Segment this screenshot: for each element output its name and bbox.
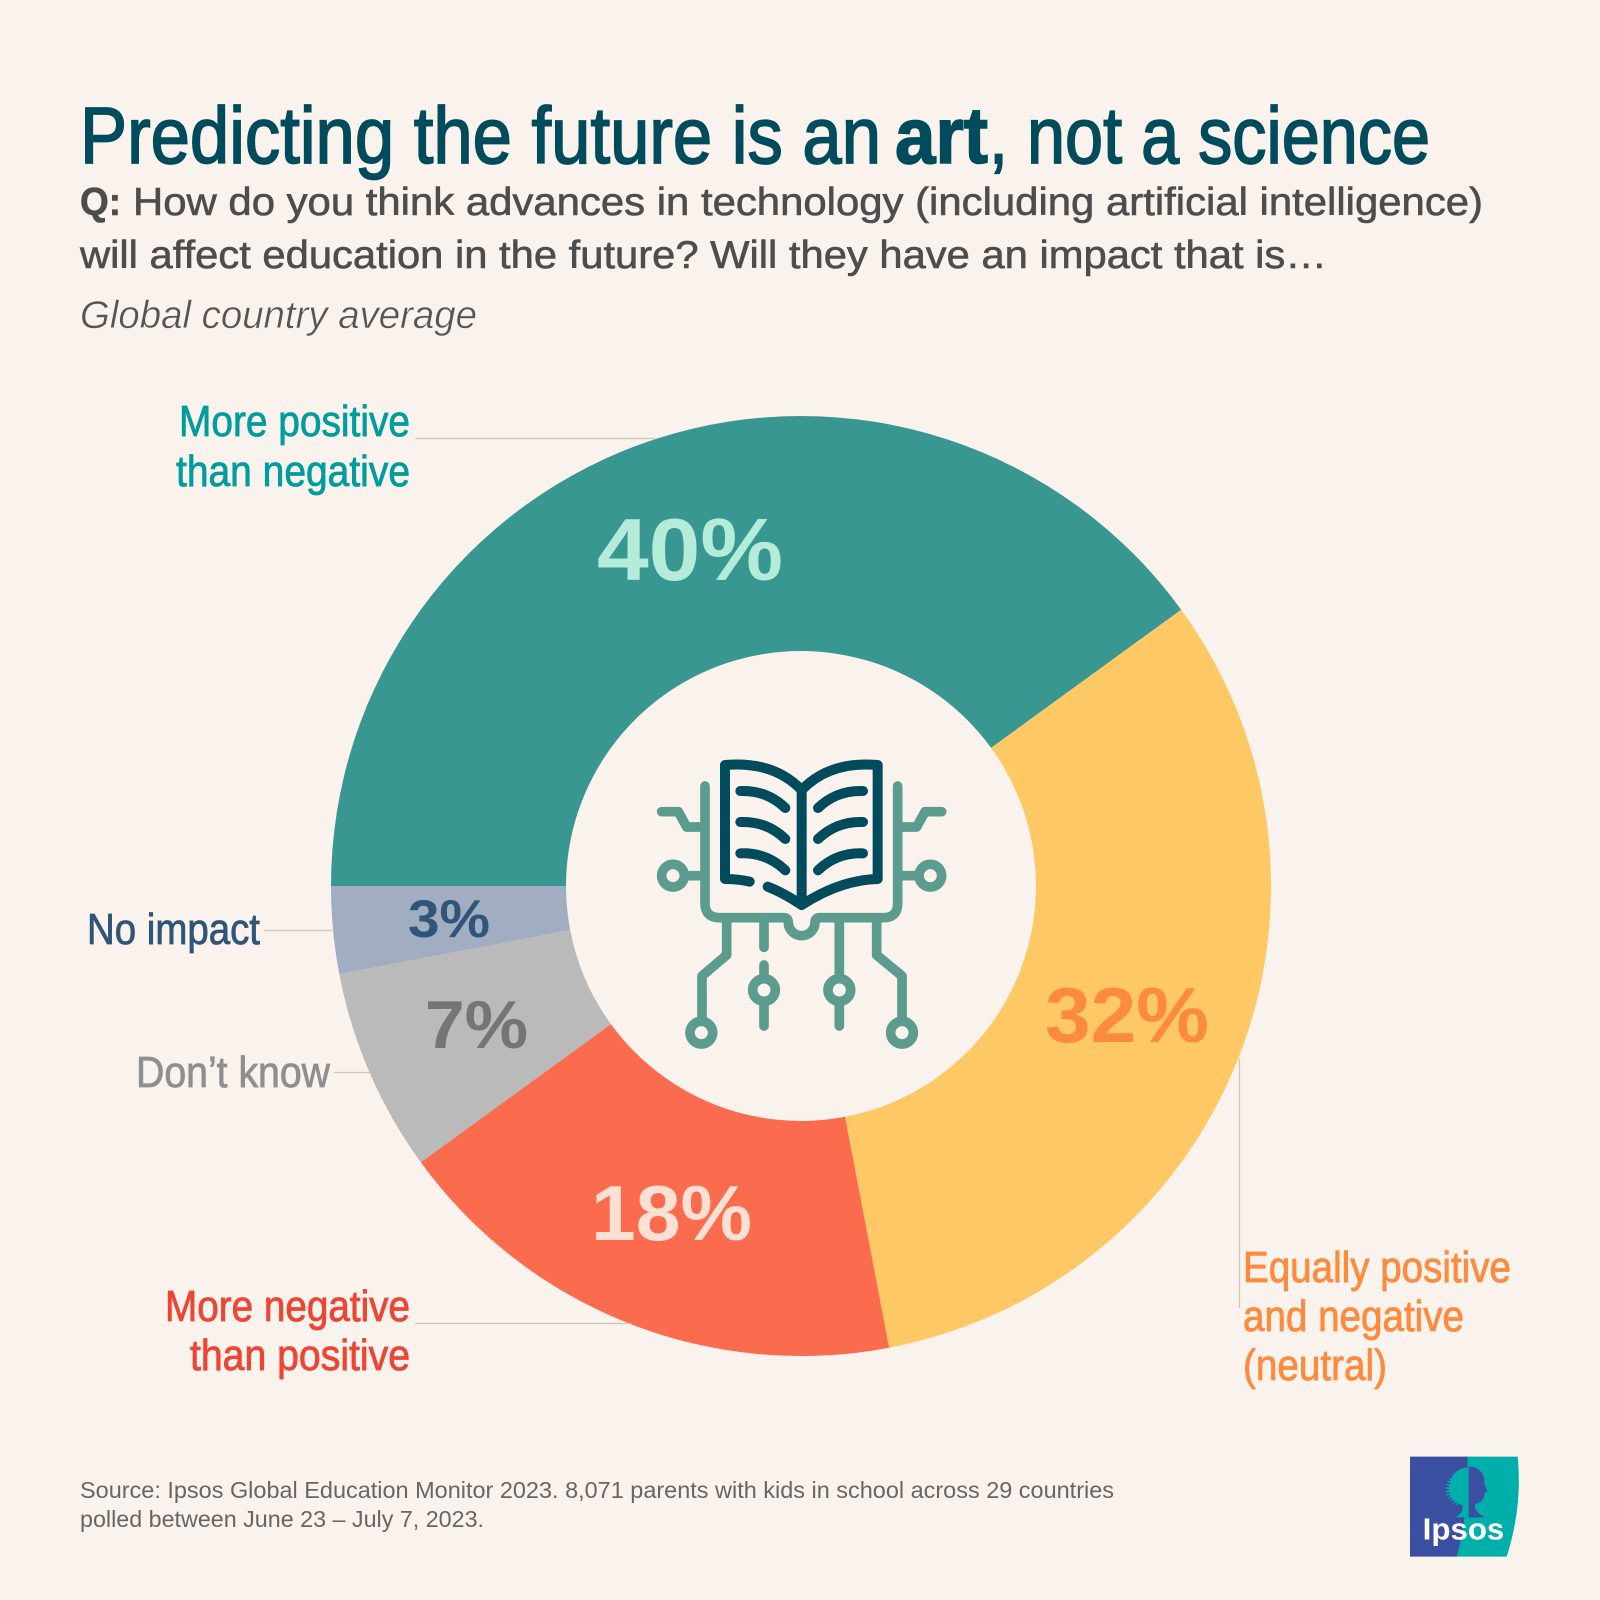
slice: no impact 3% (331, 886, 570, 974)
leader lines (264, 438, 1240, 1324)
logo: wordmark: Ipsos (1423, 1512, 1504, 1546)
label: more positive than negative: More positive (179, 397, 410, 446)
icon: open book (725, 764, 878, 905)
label: don't know: Don’t know (136, 1048, 330, 1097)
title: Predicting the future is an (80, 91, 881, 180)
question text (79, 181, 1483, 277)
subtitle: global country average: Global country average (80, 294, 477, 337)
value: 3%: 3% (408, 890, 490, 949)
label: more positive than negative (176, 397, 410, 496)
icon: book with circuit (662, 764, 942, 1044)
icon: circuit traces (662, 786, 942, 1044)
title (80, 91, 1430, 180)
value: 7%: 7% (425, 987, 528, 1063)
title: , not a science (989, 91, 1430, 180)
label: equally positive and negative (neutral): (neutral) (1243, 1341, 1387, 1390)
donut chart (331, 416, 1271, 1356)
source note: polled between June 23 – July 7, 2023. (80, 1506, 484, 1532)
slice: more negative than positive 18% (421, 1024, 889, 1356)
label: more positive than negative: than negative (176, 447, 410, 496)
value: 40%: 40% (597, 500, 783, 599)
logo: Ipsos (1410, 1457, 1519, 1557)
logo: tree crown (1449, 1467, 1468, 1517)
question text: will affect education in the future? Will they have an impact that is… (79, 234, 1327, 277)
logo: teal background (1455, 1457, 1519, 1557)
label: more negative than positive: More negative (165, 1282, 410, 1331)
slice: don't know 7% (339, 930, 611, 1162)
logo: blue panel (1410, 1457, 1467, 1557)
slice: more positive than negative 40% (331, 416, 1181, 886)
logo: crown speckle (1447, 1470, 1461, 1504)
label: equally positive and negative (neutral): Equally positive (1243, 1243, 1511, 1292)
label: more negative than positive (165, 1282, 410, 1380)
source note: Source: Ipsos Global Education Monitor 2023. 8,071 parents with kids in school across 29 countries (80, 1477, 1114, 1503)
logo: face profile (1469, 1467, 1487, 1517)
label: more negative than positive: than positive (190, 1331, 410, 1380)
value: 32%: 32% (1045, 971, 1209, 1059)
question text: How do you think advances in technology (including artificial intelligence) (133, 181, 1483, 224)
question text: Q: (80, 181, 121, 224)
title: art (895, 91, 988, 180)
label: equally positive and negative (neutral): and negative (1243, 1292, 1464, 1341)
source note (80, 1477, 1114, 1532)
label: equally positive and negative (neutral) (1243, 1243, 1511, 1390)
slice: equally positive and negative 32% (845, 610, 1271, 1348)
value: 18%: 18% (591, 1169, 752, 1257)
label: no impact: No impact (87, 905, 260, 954)
